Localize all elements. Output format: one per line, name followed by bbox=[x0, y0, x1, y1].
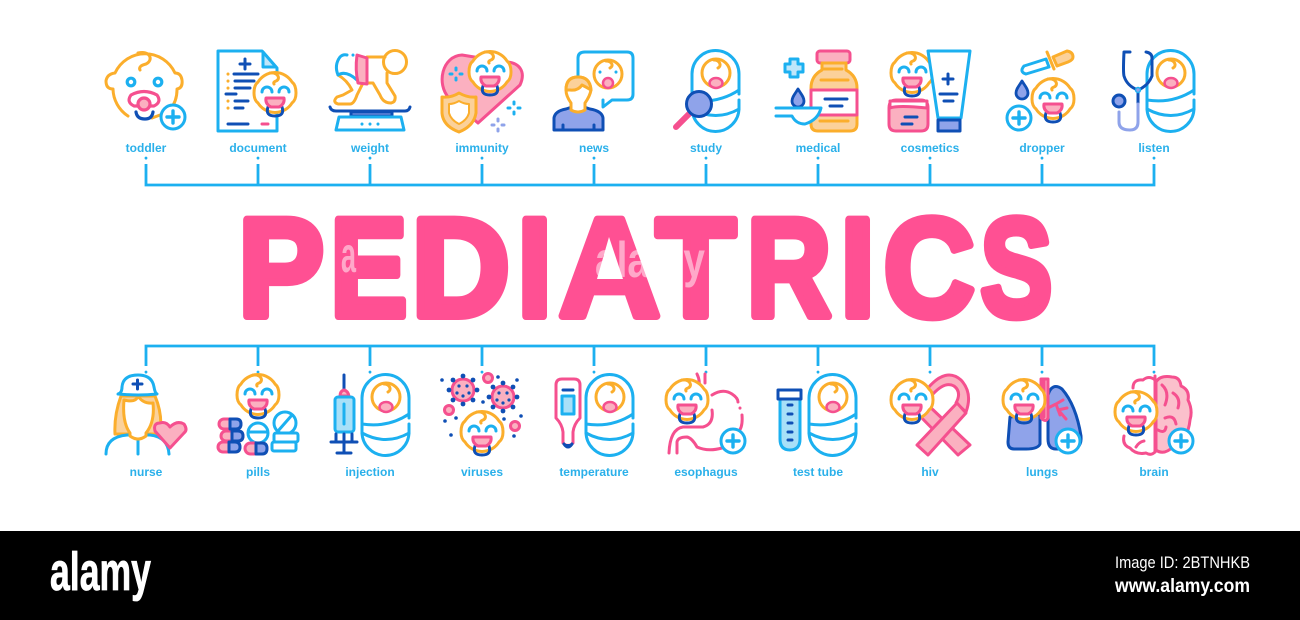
icon: toddler bbox=[106, 52, 185, 129]
label: dropper: dropper bbox=[1019, 141, 1065, 155]
icon: immunity bbox=[442, 52, 522, 132]
label: immunity: immunity bbox=[455, 141, 509, 155]
title: R bbox=[747, 190, 831, 346]
footer logo: alamy bbox=[50, 542, 151, 602]
label: news: news bbox=[579, 141, 609, 155]
title: P bbox=[238, 189, 324, 346]
label: brain: brain bbox=[1139, 465, 1169, 479]
footer bar bbox=[0, 531, 1300, 620]
icon: lungs bbox=[1003, 379, 1081, 453]
title: I bbox=[518, 190, 552, 346]
website: www.alamy.com bbox=[1114, 576, 1250, 597]
icon: temperature bbox=[556, 375, 633, 455]
label: medical: medical bbox=[796, 141, 840, 155]
icon: listen bbox=[1113, 51, 1194, 131]
image id: Image ID: 2BTNHKB bbox=[1115, 553, 1250, 572]
watermark: alamy bbox=[595, 232, 705, 288]
watermark bbox=[341, 227, 705, 288]
tube bbox=[778, 390, 801, 450]
title: E bbox=[330, 191, 407, 347]
icon: document bbox=[218, 51, 296, 131]
syringe bbox=[331, 375, 357, 453]
icon: weight bbox=[330, 50, 410, 130]
stethoscope bbox=[1113, 52, 1152, 130]
icon: medical bbox=[776, 51, 857, 131]
label: viruses: viruses bbox=[461, 465, 503, 479]
label: nurse: nurse bbox=[130, 465, 163, 479]
label: toddler: toddler bbox=[126, 141, 167, 155]
label: document: document bbox=[229, 141, 287, 155]
label: pills: pills bbox=[246, 465, 270, 479]
title: A bbox=[559, 189, 660, 346]
icon: hiv bbox=[891, 375, 970, 455]
icon: test tube bbox=[778, 375, 856, 455]
label: hiv: hiv bbox=[921, 465, 939, 479]
top connector lines bbox=[145, 158, 1155, 185]
icon: brain bbox=[1115, 376, 1193, 454]
title A counter bbox=[597, 237, 623, 279]
icon: esophagus bbox=[666, 374, 745, 453]
label: test tube: test tube bbox=[793, 465, 843, 479]
label: listen: listen bbox=[1138, 141, 1170, 155]
title: T bbox=[656, 190, 736, 346]
icon: injection bbox=[331, 375, 409, 455]
title: C bbox=[884, 190, 975, 346]
icon: news bbox=[554, 52, 633, 130]
label: study: study bbox=[690, 141, 722, 155]
label: weight: weight bbox=[350, 141, 389, 155]
icon: cosmetics bbox=[889, 51, 970, 131]
label: temperature: temperature bbox=[559, 465, 629, 479]
label: injection: injection bbox=[345, 465, 395, 479]
title: D bbox=[411, 190, 510, 346]
title bbox=[238, 189, 1052, 347]
bottom connector lines bbox=[145, 346, 1155, 372]
icon: nurse bbox=[106, 375, 186, 454]
watermark: a bbox=[341, 227, 357, 283]
icon: pills bbox=[218, 375, 298, 454]
label: cosmetics: cosmetics bbox=[901, 141, 960, 155]
icon: dropper bbox=[1007, 51, 1074, 130]
title: S bbox=[980, 191, 1052, 346]
thermometer bbox=[556, 379, 580, 447]
icon: viruses bbox=[440, 374, 523, 455]
icon: study bbox=[676, 51, 739, 131]
label: esophagus: esophagus bbox=[674, 465, 738, 479]
label: lungs: lungs bbox=[1026, 465, 1058, 479]
title: I bbox=[840, 190, 875, 346]
magnifier bbox=[676, 92, 712, 127]
